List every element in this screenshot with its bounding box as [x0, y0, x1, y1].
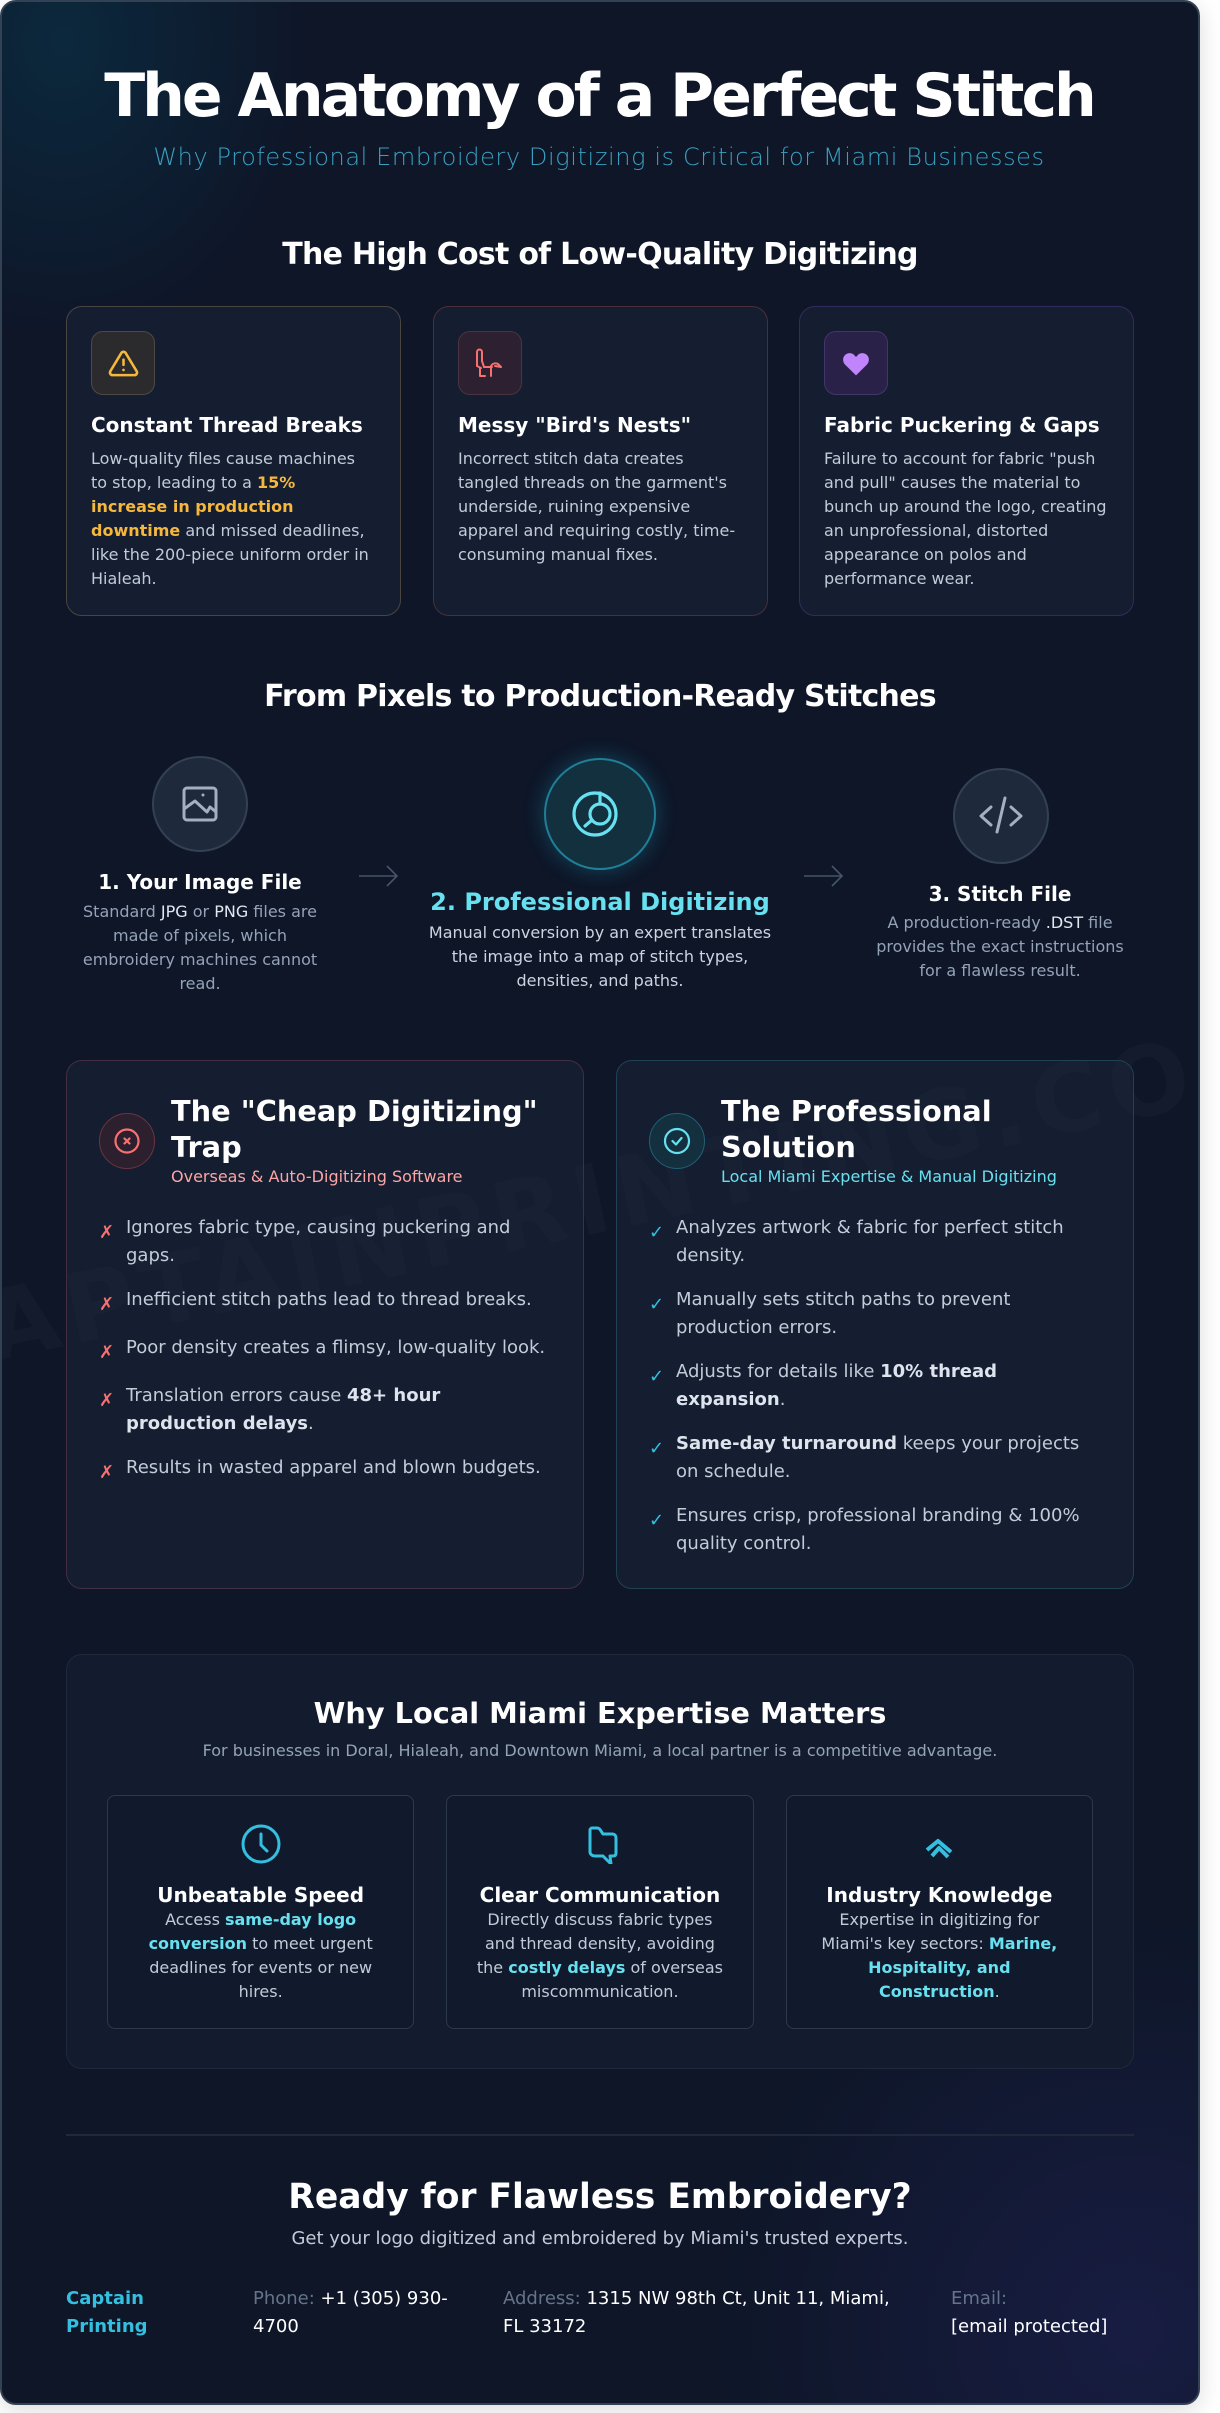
- panel: cheap digitizing trap: [66, 1060, 584, 1589]
- list of problems: ✗: [99, 1390, 114, 1411]
- card heading: Messy "Bird's Nests": [458, 413, 691, 437]
- footer: email: [951, 2288, 1107, 2337]
- card heading: Unbeatable Speed: [157, 1883, 364, 1907]
- footer: email: [email protected]: [951, 2316, 1107, 2337]
- card text: Low-quality files cause machines to stop, leading to a 15% increase in production downtime and missed deadlines, like the 200-piece uniform order in Hialeah.: [91, 449, 369, 588]
- panel subheading: Overseas & Auto-Digitizing Software: [171, 1167, 463, 1186]
- card text: Failure to account for fabric "push and pull" causes the material to bunch up around the logo, creating an unprofessional, distorted appearance on polos and performance wear.: [824, 449, 1107, 588]
- step 1 text: [83, 870, 317, 993]
- list of benefits: Ensures crisp, professional branding & 100% quality control.: [676, 1505, 1080, 1554]
- list of problems: Translation errors cause 48+ hour production delays.: [126, 1385, 440, 1434]
- list of problems: ✗: [99, 1462, 114, 1483]
- icon: image file: [152, 756, 248, 852]
- list of problems: [99, 1217, 545, 1483]
- icon: code file: [953, 768, 1049, 864]
- list of problems: Inefficient stitch paths lead to thread breaks.: [126, 1289, 532, 1310]
- call to action text: Get your logo digitized and embroidered by Miami's trusted experts.: [291, 2228, 909, 2249]
- card heading: Industry Knowledge: [826, 1883, 1052, 1907]
- list of benefits: Analyzes artwork & fabric for perfect stitch density.: [676, 1217, 1064, 1266]
- list of problems: Ignores fabric type, causing puckering and gaps.: [126, 1217, 510, 1266]
- panel: professional solution: [616, 1060, 1134, 1589]
- panel: thread breaks: [66, 306, 401, 616]
- footer: address: Address: 1315 NW 98th Ct, Unit 11, Miami, FL 33172: [503, 2288, 890, 2337]
- list of problems: Poor density creates a flimsy, low-quality look.: [126, 1337, 545, 1358]
- panel: puckering: [799, 306, 1134, 616]
- title: The Anatomy of a Perfect Stitch: [104, 61, 1094, 131]
- card: speed: [107, 1795, 414, 2029]
- panel: bird's nests: [433, 306, 768, 616]
- list of benefits: Same-day turnaround keeps your projects on schedule.: [676, 1433, 1079, 1482]
- panel: local expertise: [66, 1654, 1134, 2069]
- heading: pixels to stitches: From Pixels to Production-Ready Stitches: [264, 679, 936, 714]
- footer: brand: Captain Printing: [66, 2288, 148, 2337]
- section heading: Why Local Miami Expertise Matters: [314, 1696, 886, 1730]
- list of benefits: ✓: [649, 1294, 664, 1315]
- card text: Expertise in digitizing for Miami's key sectors: Marine, Hospitality, and Construction.: [821, 1910, 1057, 2001]
- step text: Standard JPG or PNG files are made of pixels, which embroidery machines cannot read.: [83, 902, 317, 993]
- icon: heart: [824, 331, 888, 395]
- list of problems: ✗: [99, 1222, 114, 1243]
- panel heading: The "Cheap Digitizing" Trap: [171, 1094, 538, 1164]
- list of benefits: [649, 1217, 1080, 1554]
- card heading: Clear Communication: [480, 1883, 720, 1907]
- icon: check circle: [649, 1113, 705, 1169]
- step heading: 2. Professional Digitizing: [430, 888, 770, 916]
- card: industry: [786, 1795, 1093, 2029]
- step text: A production-ready .DST file provides the exact instructions for a flawless result.: [876, 913, 1124, 980]
- icon: digitizing: [544, 758, 656, 870]
- panel subheading: Local Miami Expertise & Manual Digitizing: [721, 1167, 1057, 1186]
- icon: warning triangle: [91, 331, 155, 395]
- section intro: For businesses in Doral, Hialeah, and Downtown Miami, a local partner is a competitive advantage.: [203, 1741, 997, 1760]
- card text: Incorrect stitch data creates tangled threads on the garment's underside, ruining expensive apparel and requiring costly, time-consuming manual fixes.: [458, 449, 735, 564]
- step heading: 3. Stitch File: [929, 882, 1071, 906]
- list of problems: ✗: [99, 1294, 114, 1315]
- step heading: 1. Your Image File: [98, 870, 302, 894]
- list of benefits: ✓: [649, 1222, 664, 1243]
- list of benefits: ✓: [649, 1510, 664, 1531]
- icon: clock: [242, 1824, 280, 1864]
- list of problems: ✗: [99, 1342, 114, 1363]
- divider: [66, 2134, 1134, 2136]
- card text: Access same-day logo conversion to meet urgent deadlines for events or new hires.: [149, 1910, 373, 2001]
- card heading: Constant Thread Breaks: [91, 413, 363, 437]
- step 2 text: [429, 888, 771, 990]
- step 3 text: [876, 882, 1124, 980]
- list of benefits: Manually sets stitch paths to prevent production errors.: [676, 1289, 1010, 1338]
- footer: phone: Phone: +1 (305) 930-4700: [253, 2288, 448, 2337]
- call to action heading: Ready for Flawless Embroidery?: [288, 2177, 912, 2217]
- list of problems: Results in wasted apparel and blown budgets.: [126, 1457, 541, 1478]
- step text: Manual conversion by an expert translates the image into a map of stitch types, densities, and paths.: [429, 923, 771, 990]
- heading: high cost: The High Cost of Low-Quality Digitizing: [282, 237, 918, 272]
- list of benefits: Adjusts for details like 10% thread expansion.: [676, 1361, 997, 1410]
- card heading: Fabric Puckering & Gaps: [824, 413, 1100, 437]
- panel heading: The Professional Solution: [721, 1094, 992, 1164]
- arrow: [359, 866, 398, 886]
- list of benefits: ✓: [649, 1366, 664, 1387]
- icon: speech bubble: [588, 1826, 618, 1864]
- subtitle: Why Professional Embroidery Digitizing is Critical for Miami Businesses: [153, 143, 1045, 171]
- card text: Directly discuss fabric types and thread density, avoiding the costly delays of overseas miscommunication.: [477, 1910, 723, 2001]
- icon: tangled thread: [458, 331, 522, 395]
- footer: email: Email:: [951, 2288, 1007, 2309]
- arrow: [804, 866, 843, 886]
- icon: x circle: [99, 1113, 155, 1169]
- list of benefits: ✓: [649, 1438, 664, 1459]
- card: communication: [446, 1795, 754, 2029]
- icon: chevrons: [926, 1838, 952, 1858]
